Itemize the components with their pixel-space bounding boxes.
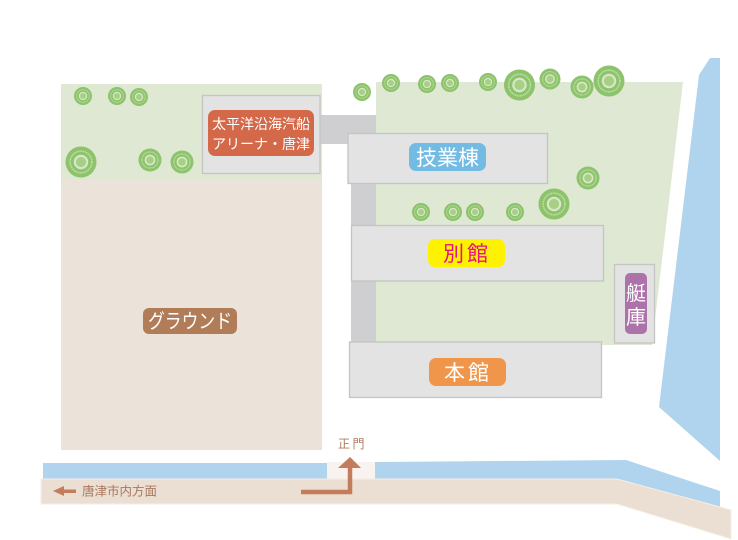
- ground label: グラウンド: [148, 310, 232, 333]
- arrow: to main gate: [301, 457, 361, 492]
- main gate bridge: [327, 462, 375, 479]
- arena label: アリーナ・唐津: [212, 136, 310, 152]
- technical building: [348, 134, 548, 184]
- annex label: [428, 239, 505, 267]
- annex label: 別館: [443, 243, 491, 266]
- river: south: [43, 463, 327, 479]
- trees: right area: [353, 66, 624, 221]
- arrow: to Karatsu city: [53, 486, 76, 496]
- arena building: [202, 96, 320, 174]
- technical building label: 技業棟: [416, 147, 479, 170]
- arena label: [208, 110, 314, 156]
- arena label: 太平洋沿海汽船: [212, 116, 310, 132]
- trees: left area: [66, 87, 194, 178]
- main building label: 本館: [444, 362, 492, 385]
- direction label: 唐津市内方面: [82, 484, 157, 498]
- right green area: [376, 82, 683, 345]
- annex building: [352, 226, 604, 281]
- main gate label: 正門: [338, 437, 367, 451]
- river: east: [659, 58, 720, 461]
- boathouse label: [625, 273, 647, 334]
- boathouse label: 艇: [626, 282, 646, 305]
- technical building label: [409, 143, 486, 171]
- left green area: [61, 84, 322, 180]
- boathouse: [614, 264, 654, 343]
- main building: [350, 342, 602, 398]
- river: south-east: [375, 460, 720, 508]
- ground area: [61, 180, 322, 450]
- boathouse label: 庫: [626, 306, 646, 329]
- main building label: [429, 358, 506, 386]
- grey walkway: [320, 115, 376, 345]
- road: [41, 479, 731, 539]
